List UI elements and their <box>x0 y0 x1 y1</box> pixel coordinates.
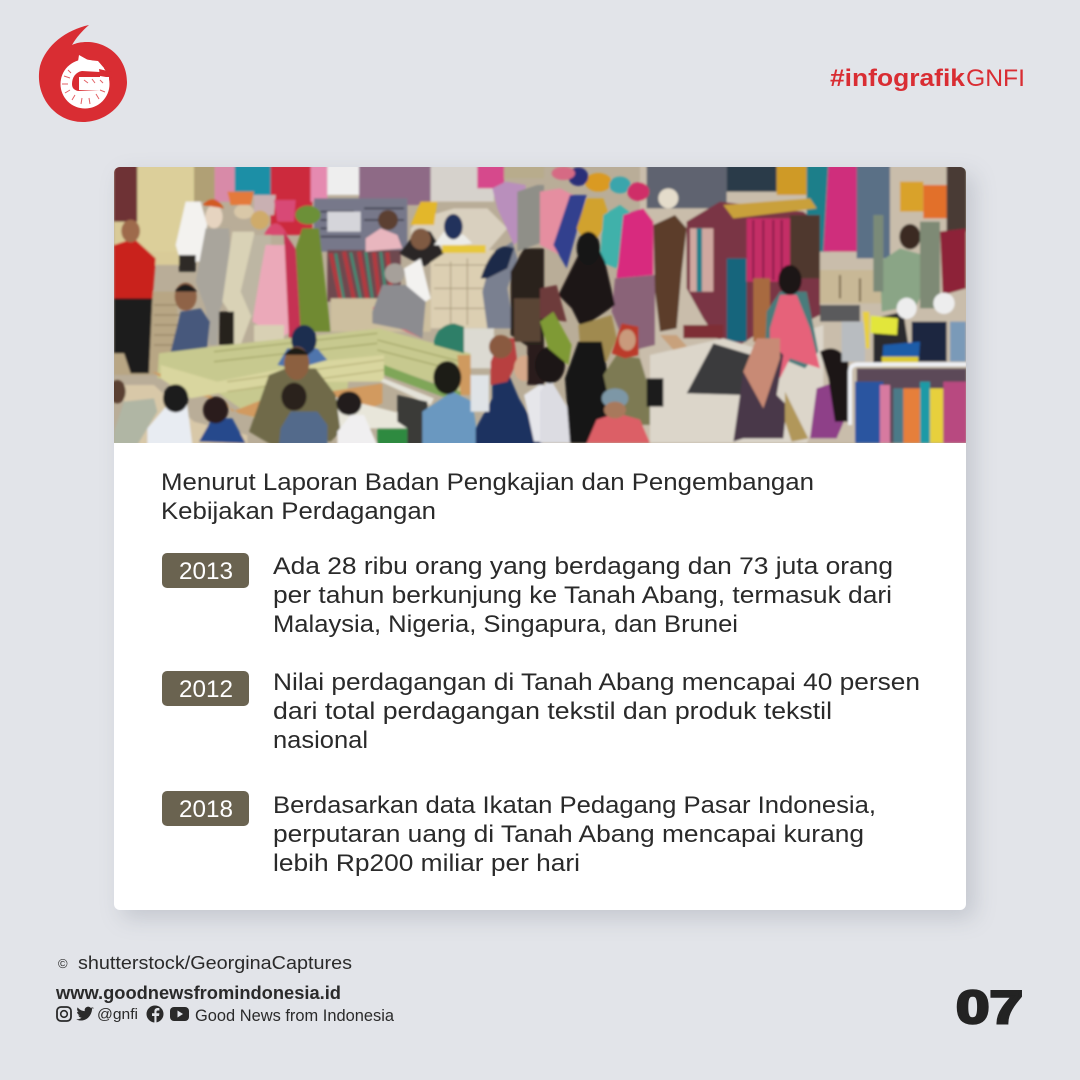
text block 2012 <box>273 669 920 754</box>
hashtag heading: GNFI <box>966 65 1025 92</box>
text block 2013 <box>273 553 893 638</box>
woman in black <box>558 250 616 326</box>
text block 2013: Malaysia, Nigeria, Singapura, dan Brunei <box>273 611 738 638</box>
seated man plaid <box>171 308 210 352</box>
green hijab <box>434 323 464 353</box>
right bottom people <box>422 392 479 445</box>
white mannequin heads & dark tops <box>873 312 910 365</box>
hashtag heading: #infografik <box>830 65 966 92</box>
photo credit: shutterstock/GeorginaCaptures <box>78 953 352 973</box>
panel: white content card <box>114 167 966 910</box>
gray second mannequin <box>240 234 272 315</box>
text block 2018 <box>273 792 876 877</box>
yellow/garment <box>411 202 437 225</box>
twitter handle: @gnfi <box>97 1006 138 1023</box>
text block 2012: dari total perdagangan tekstil dan produk tekstil <box>273 698 832 725</box>
pink hijab woman with teal top <box>765 292 818 368</box>
pink mannequin <box>252 245 291 338</box>
brown mannequin <box>653 215 687 332</box>
photo left half <box>109 165 544 448</box>
seated woman pink and white bag <box>399 228 444 267</box>
photo credit: © <box>58 956 68 971</box>
man in red shirt <box>114 238 156 300</box>
year badge 2012 <box>162 671 249 706</box>
text block 2013: Ada 28 ribu orang yang berdagang dan 73 juta orang <box>273 553 893 580</box>
icon: instagram <box>57 1007 71 1021</box>
mannequins left <box>540 188 573 255</box>
woman plaid hijab <box>482 242 517 328</box>
page number: 07 <box>956 981 1023 1033</box>
logo: GNFI red swirl with garuda G <box>39 25 127 122</box>
text block 2013: per tahun berkunjung ke Tanah Abang, termasuk dari <box>273 582 892 609</box>
blue obral sign <box>882 342 920 365</box>
icon: twitter <box>76 1007 94 1021</box>
text block 2012: Nilai perdagangan di Tanah Abang mencapai 40 persen <box>273 669 920 696</box>
intro text <box>161 469 814 525</box>
man in green shirt <box>880 248 927 312</box>
purple mannequins <box>492 182 526 245</box>
bottom men <box>279 412 327 445</box>
woman mannequin purple <box>810 382 847 438</box>
year badge 2013: 2013 <box>179 558 233 585</box>
year badge 2013 <box>162 553 249 588</box>
clothes rack <box>687 202 820 345</box>
website url: www.goodnewsfromindonesia.id <box>55 983 341 1003</box>
social media row <box>57 1006 395 1025</box>
women at counter <box>366 228 402 252</box>
shelves <box>820 270 883 303</box>
text block 2018: Berdasarkan data Ikatan Pedagang Pasar Indonesia, <box>273 792 876 819</box>
box fort <box>157 328 472 408</box>
intro text: Kebijakan Perdagangan <box>161 498 436 525</box>
text block 2018: perputaran uang di Tanah Abang mencapai kurang <box>273 821 864 848</box>
cream mannequin <box>222 231 255 345</box>
icon: youtube <box>170 1007 189 1021</box>
text block 2018: lebih Rp200 miliar per hari <box>273 850 580 877</box>
woman with scarf and bag <box>733 338 787 442</box>
white mannequin <box>176 202 207 262</box>
photo: crowded Tanah Abang textile market <box>109 165 970 448</box>
year badge 2018: 2018 <box>179 796 233 823</box>
green mannequin <box>296 228 331 332</box>
floor <box>650 325 823 443</box>
hashtag heading <box>830 65 1025 92</box>
text block 2012: nasional <box>273 727 368 754</box>
intro text: Menurut Laporan Badan Pengkajian dan Pengembangan <box>161 469 814 496</box>
smiling man <box>249 368 341 448</box>
year badge 2018 <box>162 791 249 826</box>
hijab behind fort <box>277 348 327 368</box>
photo right half <box>535 165 970 443</box>
facebook and youtube name: Good News from Indonesia <box>195 1006 395 1025</box>
rail and hanging garments <box>857 368 967 443</box>
icon: facebook <box>146 1006 164 1023</box>
bottom left people <box>540 378 570 443</box>
year badge 2012: 2012 <box>179 676 233 703</box>
yellow price sign <box>870 316 898 335</box>
gray dress mannequin <box>196 228 232 345</box>
